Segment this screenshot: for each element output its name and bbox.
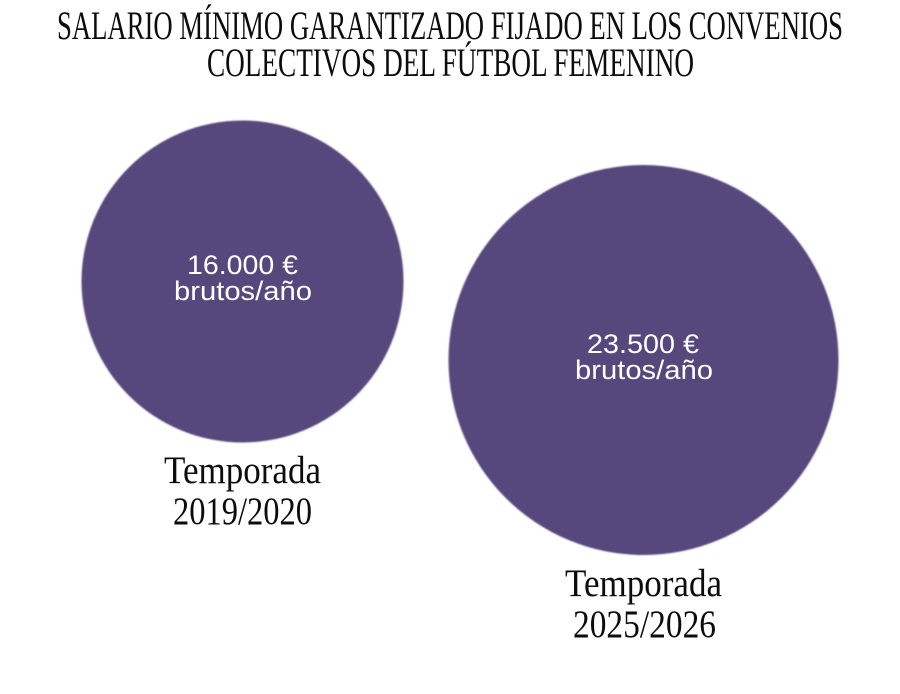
label: season 2019/2020: Temporada (164, 449, 321, 492)
value: 23.500 euros: brutos/año (575, 355, 713, 385)
title (57, 3, 843, 85)
circle: 2019/2020 salary (82, 120, 404, 442)
label: season 2025/2026 (565, 562, 722, 646)
label: season 2019/2020 (164, 449, 321, 533)
value: 16.000 euros (174, 250, 312, 306)
value: 23.500 euros: 23.500 € (587, 329, 699, 359)
label: season 2025/2026: 2025/2026 (573, 603, 716, 646)
circle: 2025/2026 salary (448, 165, 838, 555)
value: 16.000 euros: brutos/año (174, 276, 312, 306)
value: 23.500 euros (575, 329, 713, 385)
value: 16.000 euros: 16.000 € (187, 250, 298, 280)
label: season 2019/2020: 2019/2020 (173, 490, 312, 533)
label: season 2025/2026: Temporada (565, 562, 722, 605)
